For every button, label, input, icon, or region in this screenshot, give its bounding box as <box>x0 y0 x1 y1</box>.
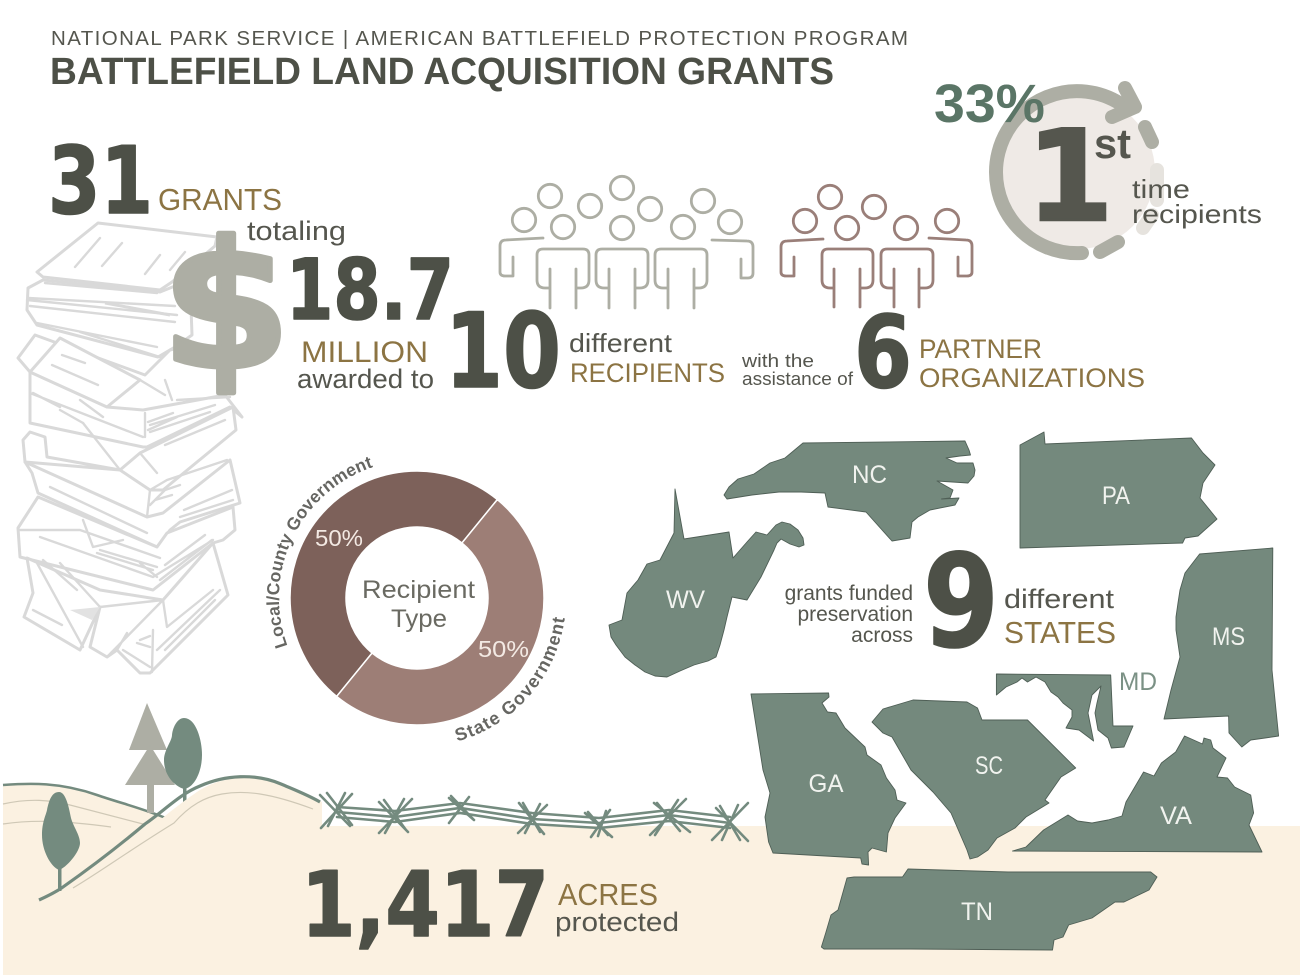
state: Maryland <box>996 668 1157 748</box>
stat: 31 grants: 31 <box>48 127 153 235</box>
stat: 1,417 acres protected: ACRES <box>558 877 658 912</box>
stat: 33% first time recipients: 1 <box>1026 103 1114 250</box>
state: North Carolina <box>724 441 975 541</box>
segment: local/county government 50% <box>290 471 497 696</box>
stat: 9 different states: STATES <box>1004 615 1116 650</box>
state: Mississippi: MS <box>1212 623 1245 651</box>
state: South Carolina <box>872 700 1076 859</box>
landscape background <box>3 784 1300 975</box>
header text: BATTLEFIELD LAND ACQUISITION GRANTS <box>50 51 834 93</box>
stat: 18.7 million: MILLION <box>301 336 428 369</box>
stat: 9 different states: preservation <box>797 603 913 626</box>
state: West Virginia <box>609 489 804 677</box>
illustration: stack of documents <box>18 223 242 673</box>
stat: 6 partner organizations: ORGANIZATIONS <box>919 363 1145 393</box>
icon: circular first-time arrow <box>996 88 1157 253</box>
stat: 10 different recipients <box>445 292 725 412</box>
stat: 31 grants: GRANTS <box>158 182 282 217</box>
state: Virginia: VA <box>1160 802 1192 830</box>
stat: 18.7 million: 18.7 <box>286 241 454 339</box>
stat: 10 different recipients: 10 <box>445 292 561 412</box>
curved label: local/county government: Local/County Government <box>266 456 373 649</box>
stat: 18.7 million: awarded to <box>297 364 434 394</box>
state: South Carolina: SC <box>975 752 1003 780</box>
stat: 31 grants <box>48 127 346 246</box>
state: Virginia <box>1012 736 1262 852</box>
stat: 6 partner organizations: 6 <box>854 294 912 411</box>
stat: 33% first time recipients: st <box>1094 120 1131 167</box>
stat: 9 different states: grants funded <box>785 582 913 605</box>
label: local/county 50%: 50% <box>315 525 363 551</box>
icon: small tree on left <box>42 792 80 891</box>
stat: 6 partner organizations: with the <box>741 351 814 371</box>
stat: 18.7 million <box>286 241 454 394</box>
stat: 31 grants: totaling <box>247 216 346 246</box>
state: Mississippi <box>1164 548 1279 747</box>
header text <box>50 27 908 93</box>
state: Pennsylvania: PA <box>1102 482 1130 510</box>
stat: 9 different states: across <box>851 624 913 647</box>
center label: Recipient <box>362 576 475 604</box>
state: North Carolina: NC <box>852 461 887 489</box>
state: Pennsylvania <box>1020 432 1217 548</box>
icon: recipients people group <box>500 176 753 308</box>
stat: 6 partner organizations <box>741 294 1145 411</box>
curved label: state government: State Government <box>455 617 565 740</box>
donut chart: recipient type <box>266 456 565 740</box>
stat: 1,417 acres protected: 1,417 <box>301 853 549 958</box>
icon: oval tree on hill <box>164 718 202 810</box>
state: Georgia <box>751 693 906 865</box>
state: Tennessee: TN <box>961 898 993 926</box>
stat: 6 partner organizations: PARTNER <box>919 334 1042 364</box>
stat: 9 different states: different <box>1004 584 1115 614</box>
center label: Type <box>391 605 447 633</box>
stat: 6 partner organizations: assistance of <box>742 369 854 389</box>
stat: 33% first time recipients: recipients <box>1132 199 1262 229</box>
segment: state government 50% <box>337 500 544 725</box>
stat: 10 different recipients: different <box>569 328 673 358</box>
icon: fir tree <box>125 703 175 813</box>
stat: 33% first time recipients <box>934 74 1262 250</box>
stat: 33% first time recipients: 33% <box>934 74 1045 134</box>
label: state 50%: 50% <box>478 636 529 662</box>
stat: 9 different states <box>785 528 1116 677</box>
stat: 10 different recipients: RECIPIENTS <box>570 358 725 388</box>
stat: 9 different states: 9 <box>923 528 999 677</box>
icon: partner people group <box>781 185 972 307</box>
icon: dollar sign: $ <box>161 204 291 409</box>
header text: NATIONAL PARK SERVICE | AMERICAN BATTLEFIELD PROTECTION PROGRAM <box>51 27 908 50</box>
front hill <box>39 777 322 930</box>
state: Tennessee <box>821 869 1157 950</box>
icon: split-rail fence <box>320 793 748 841</box>
stat: 1,417 acres protected: protected <box>555 907 679 937</box>
state: Georgia: GA <box>808 770 844 798</box>
state: West Virginia: WV <box>666 586 705 614</box>
stat: 33% first time recipients: time <box>1132 174 1190 204</box>
state: Maryland: MD <box>1119 668 1157 696</box>
